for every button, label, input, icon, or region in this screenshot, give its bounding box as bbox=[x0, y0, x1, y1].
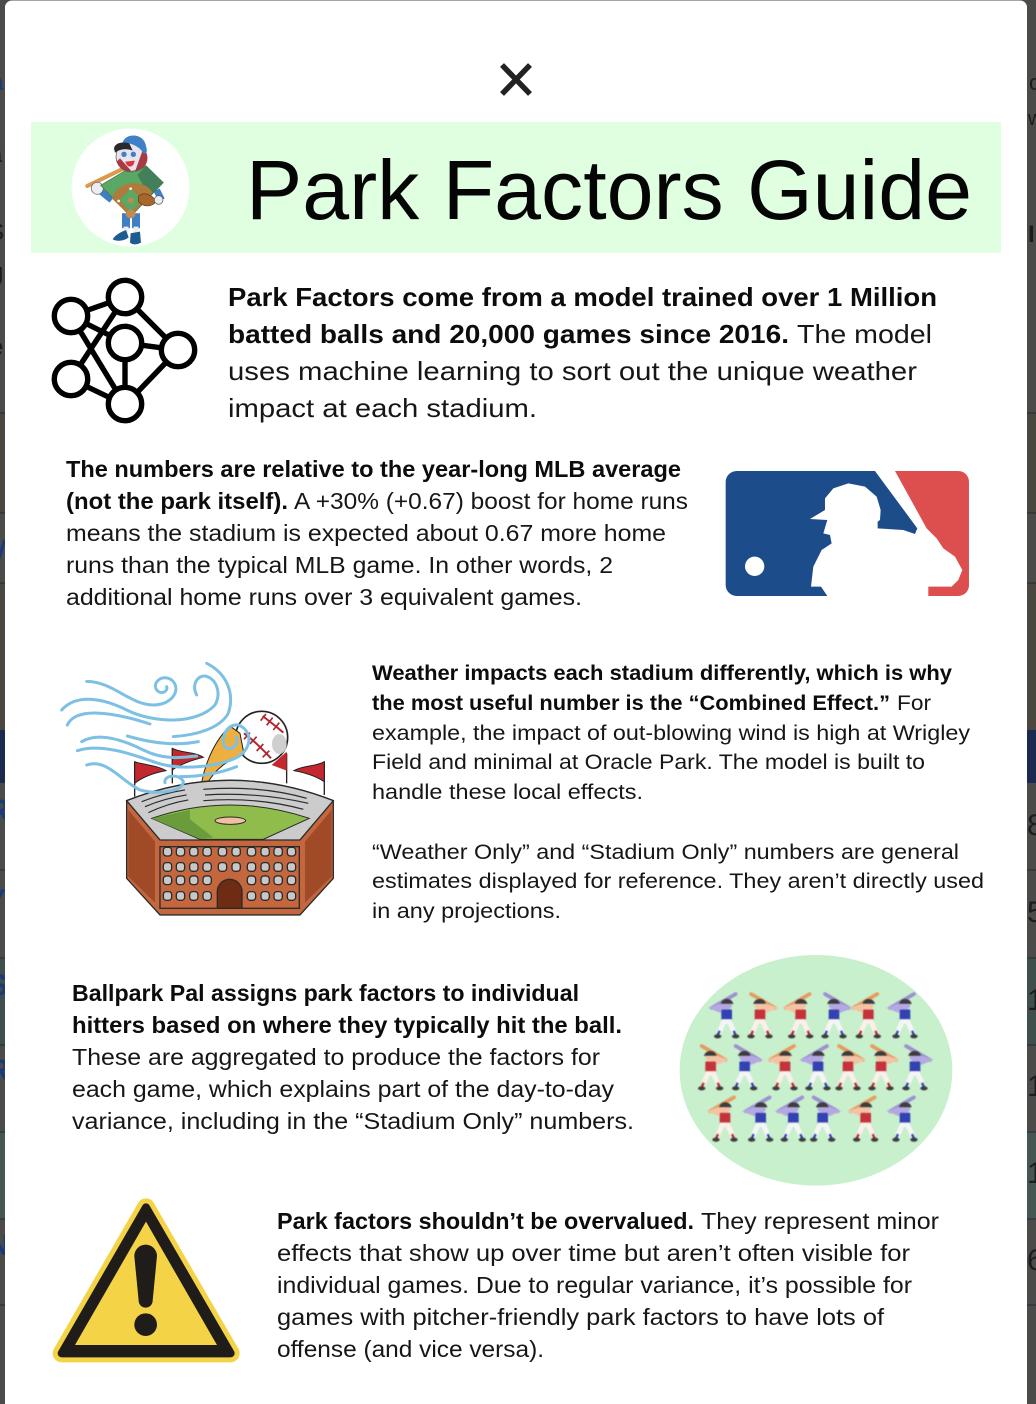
text block: relative numbers: means the stadium is expected about 0.67 more home bbox=[66, 520, 666, 546]
text block: relative numbers: The numbers are relative to the year-long MLB average bbox=[66, 456, 681, 482]
text block: overvaluing caution bbox=[277, 1208, 939, 1362]
illustration: batters in green oval bbox=[680, 955, 952, 1186]
title banner bbox=[31, 122, 1001, 253]
icon: neural network bbox=[54, 280, 195, 421]
text block: model intro: The model bbox=[797, 319, 932, 349]
text block: combined effect: Weather impacts each stadium differently, which is why bbox=[372, 661, 952, 685]
text block: model intro: batted balls and 20,000 games since 2016. bbox=[228, 319, 789, 349]
text block: relative numbers: (not the park itself). bbox=[66, 488, 288, 514]
text block: model intro: uses machine learning to sort out the unique weather bbox=[228, 356, 917, 386]
text block: individual hitters: variance, including in the “Stadium Only” numbers. bbox=[72, 1108, 634, 1134]
text block: combined effect: example, the impact of out-blowing wind is high at Wrigley bbox=[372, 721, 970, 745]
title text: Park Factors Guide bbox=[246, 143, 972, 237]
text block: combined effect bbox=[372, 661, 984, 923]
icon: baseball mascot bbox=[72, 128, 190, 246]
text block: combined effect: Field and minimal at Oracle Park. The model is built to bbox=[372, 750, 925, 774]
text block: relative numbers: A +30% (+0.67) boost for home runs bbox=[294, 488, 688, 514]
text block: overvaluing caution: individual games. Due to regular variance, it’s possible for bbox=[277, 1272, 912, 1298]
text block: overvaluing caution: effects that show up over time but aren’t often visible for bbox=[277, 1240, 910, 1266]
text block: individual hitters: each game, which explains part of the day-to-day bbox=[72, 1076, 615, 1102]
icon: warning triangle bbox=[62, 1207, 231, 1353]
flame trail bbox=[199, 726, 244, 804]
icon: close X bbox=[502, 65, 530, 94]
baseball bbox=[236, 711, 288, 771]
text block: relative numbers bbox=[66, 456, 688, 610]
text block: relative numbers: runs than the typical MLB game. In other words, 2 bbox=[66, 552, 613, 578]
text block: combined effect: “Weather Only” and “Stadium Only” numbers are general bbox=[372, 840, 959, 864]
text block: combined effect: the most useful number is the “Combined Effect.” bbox=[372, 691, 890, 715]
text block: relative numbers: additional home runs over 3 equivalent games. bbox=[66, 584, 582, 610]
text block: combined effect: in any projections. bbox=[372, 899, 561, 923]
illustration: stadium with wind and baseball bbox=[62, 663, 333, 915]
text block: individual hitters bbox=[72, 980, 634, 1134]
text block: overvaluing caution: offense (and vice versa). bbox=[277, 1336, 544, 1362]
text block: combined effect: handle these local effects. bbox=[372, 780, 643, 804]
text block: model intro: impact at each stadium. bbox=[228, 393, 537, 423]
text block: combined effect: estimates displayed for reference. They aren’t directly used bbox=[372, 869, 984, 893]
text block: individual hitters: hitters based on where they typically hit the ball. bbox=[72, 1012, 622, 1038]
text block: individual hitters: These are aggregated to produce the factors for bbox=[72, 1044, 600, 1070]
text block: combined effect: For bbox=[897, 691, 931, 715]
stadium body bbox=[127, 780, 333, 915]
text block: model intro: Park Factors come from a model trained over 1 Million bbox=[228, 282, 937, 312]
icon: MLB logo bbox=[726, 471, 969, 596]
flags bbox=[135, 748, 324, 797]
text block: overvaluing caution: They represent minor bbox=[701, 1208, 939, 1234]
text block: overvaluing caution: games with pitcher-friendly park factors to have lots of bbox=[277, 1304, 885, 1330]
wind swirls bbox=[62, 663, 249, 792]
text block: individual hitters: Ballpark Pal assigns park factors to individual bbox=[72, 980, 579, 1006]
text block: model intro bbox=[228, 282, 937, 423]
text block: overvaluing caution: Park factors shouldn’t be overvalued. bbox=[277, 1208, 694, 1234]
windows bbox=[163, 847, 296, 900]
